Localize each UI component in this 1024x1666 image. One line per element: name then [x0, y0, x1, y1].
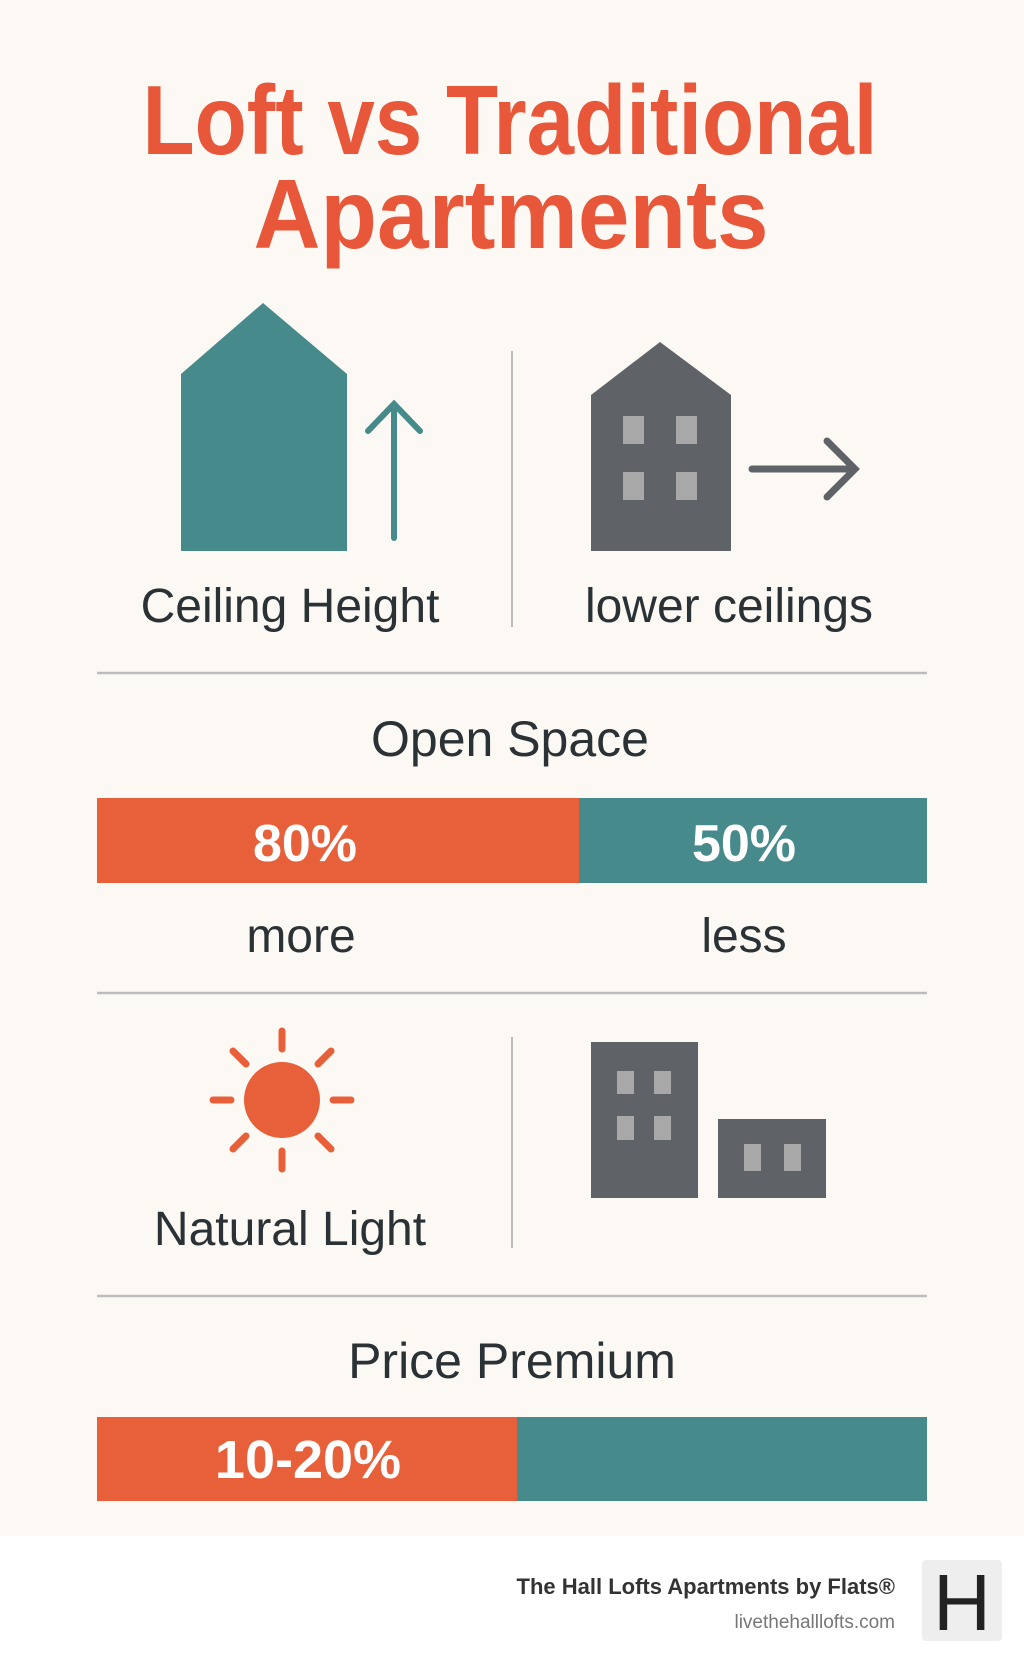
- title: Loft vs Traditional: [142, 65, 878, 175]
- icon: sun: [213, 1031, 351, 1169]
- label: less: less: [701, 910, 787, 963]
- title: [142, 65, 878, 269]
- footer text: The Hall Lofts Apartments by Flats®: [517, 1574, 895, 1599]
- logo: H: [933, 1558, 991, 1647]
- bar chart: open space: [97, 798, 927, 883]
- bar chart: price premium: [97, 1417, 927, 1501]
- arrow: up: [368, 404, 420, 538]
- label: Natural Light: Natural Light: [154, 1203, 426, 1256]
- bar chart: open space: 80%: [253, 815, 357, 873]
- divider: ceiling: [511, 351, 513, 627]
- icon: gray apartment building: [591, 342, 731, 551]
- label: more: more: [246, 910, 356, 963]
- footer text: livethehalllofts.com: [734, 1612, 895, 1633]
- arrow: right: [752, 441, 855, 497]
- bar chart: open space: 50%: [692, 815, 796, 873]
- title: Apartments: [254, 159, 768, 269]
- bar chart: price premium: 10-20%: [215, 1430, 401, 1490]
- heading: Open Space: Open Space: [371, 711, 649, 767]
- footer text: [517, 1574, 895, 1633]
- heading: Price Premium: Price Premium: [348, 1333, 676, 1389]
- icon: teal loft house: [181, 303, 347, 551]
- icon: buildings: [591, 1042, 826, 1198]
- label: Ceiling Height: Ceiling Height: [141, 580, 439, 633]
- label: lower ceilings: lower ceilings: [585, 580, 873, 633]
- divider: light: [511, 1037, 513, 1248]
